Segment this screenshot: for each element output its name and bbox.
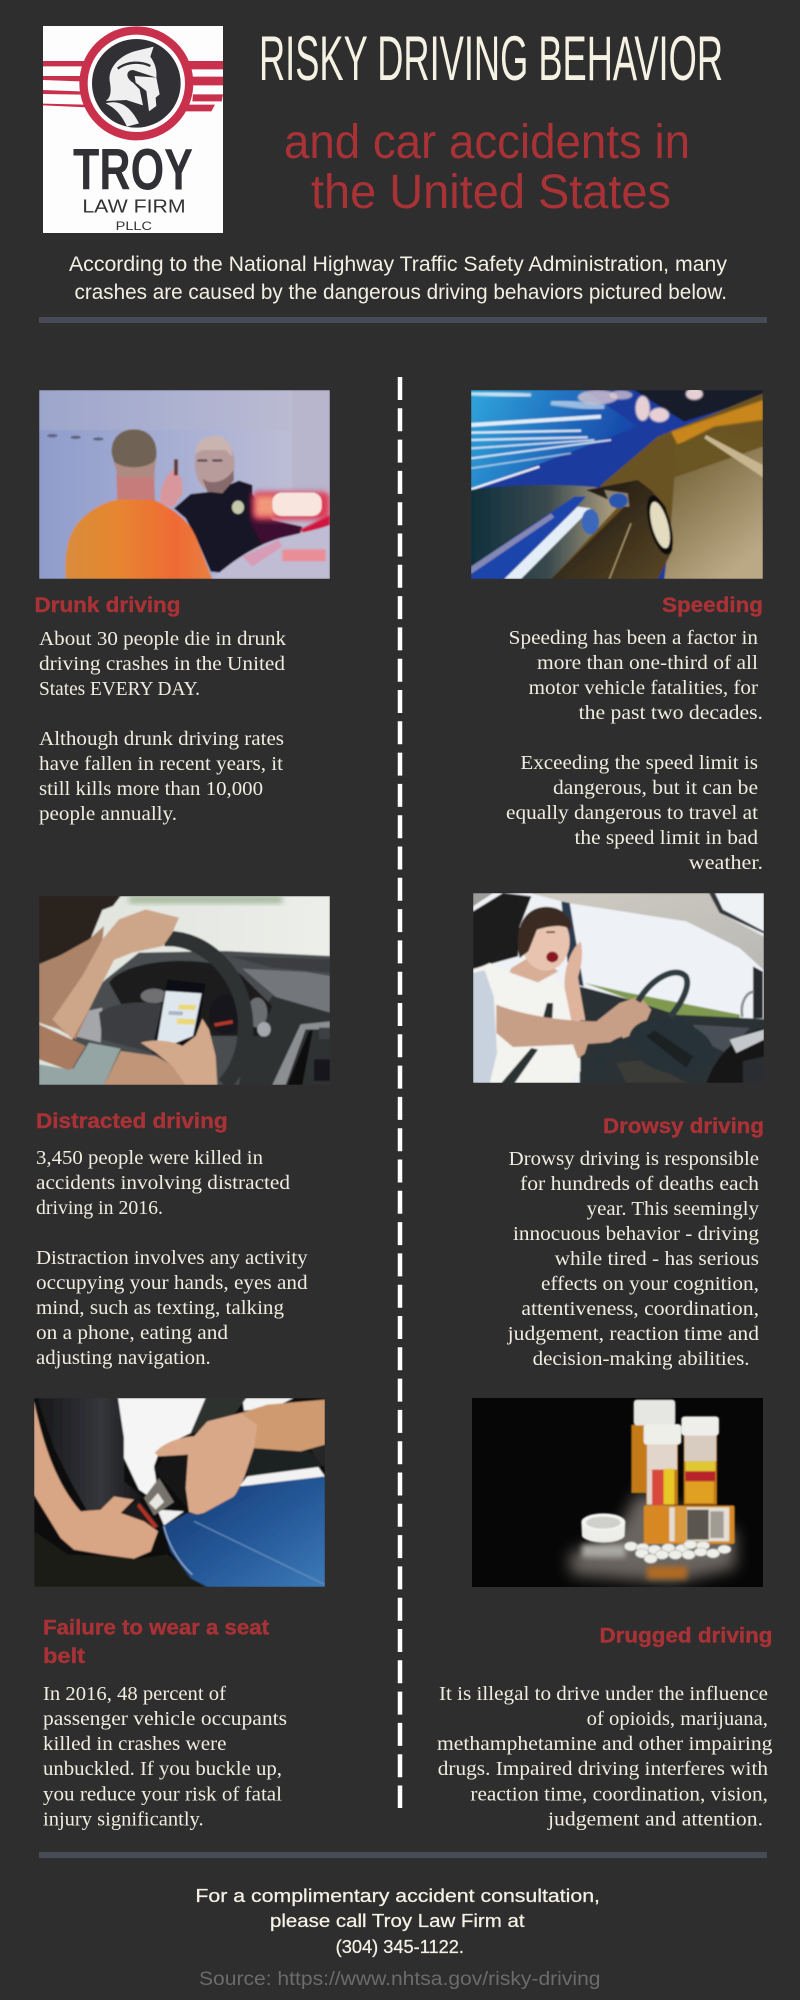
- body text: of opioids, marijuana,: [587, 1708, 768, 1730]
- body text: effects on your cognition,: [541, 1273, 759, 1295]
- left arm and hand: [34, 1401, 158, 1559]
- body text: Exceeding the speed limit is: [520, 752, 758, 774]
- body text: occupying your hands, eyes and: [36, 1272, 308, 1294]
- body text: It is illegal to drive under the influence: [439, 1683, 768, 1705]
- body text: accidents involving distracted: [36, 1172, 290, 1194]
- body text: judgement, reaction time and: [507, 1323, 759, 1345]
- neck and arm: [39, 926, 104, 1039]
- body text: [437, 1683, 772, 1831]
- body text: States EVERY DAY.: [39, 678, 200, 700]
- body text: more than one-third of all: [537, 652, 758, 674]
- photo: yawning driver: [473, 893, 764, 1083]
- body text: 3,450 people were killed in: [36, 1147, 263, 1169]
- jeans: [162, 1476, 325, 1587]
- subtitle: and car accidents in: [284, 116, 690, 169]
- seat: [473, 893, 531, 969]
- console: [706, 1028, 764, 1083]
- neck: [510, 953, 558, 982]
- photo: texting at the wheel: [39, 896, 330, 1085]
- body text: driving in 2016.: [36, 1197, 163, 1219]
- body text: methamphetamine and other impairing: [437, 1733, 772, 1755]
- body text: decision-making abilities.: [533, 1348, 750, 1370]
- photo: fastening a seat belt: [34, 1398, 325, 1587]
- body text: people annually.: [39, 803, 177, 825]
- source line: Source: https://www.nhtsa.gov/risky-driving: [199, 1969, 600, 1990]
- panel: distracted driving: [36, 896, 330, 1369]
- steering wheel: [638, 973, 687, 1017]
- phone: [152, 979, 206, 1060]
- roof and pillar: [530, 893, 764, 970]
- body text: [43, 1683, 287, 1831]
- body text: driving crashes in the United: [39, 653, 285, 675]
- body text: while tired - has serious: [555, 1248, 759, 1270]
- belt: [191, 1398, 246, 1435]
- body text: Although drunk driving rates: [39, 728, 284, 750]
- body text: [506, 627, 763, 874]
- icon: red wing stripes: [43, 61, 223, 111]
- body text: innocuous behavior - driving: [513, 1223, 759, 1245]
- driver: [116, 473, 155, 502]
- icon: helmet medallion: [79, 26, 193, 140]
- body text: motor vehicle fatalities, for: [529, 677, 758, 699]
- heading: Drugged driving: [600, 1624, 772, 1648]
- body text: weather.: [689, 852, 763, 874]
- seat of wheel spoke: [74, 1008, 102, 1043]
- officer: [174, 481, 262, 573]
- bottles: [631, 1425, 659, 1493]
- intro text: [69, 253, 727, 304]
- heading: Failure to wear a seat: [43, 1617, 269, 1640]
- raised hand: [565, 941, 585, 1020]
- road: [551, 393, 763, 579]
- heading: Drowsy driving: [603, 1115, 764, 1138]
- vents: [272, 1021, 330, 1085]
- body text: year. This seemingly: [587, 1198, 759, 1220]
- panel: speeding: [471, 388, 763, 874]
- subtitle: the United States: [311, 166, 671, 219]
- intro text: crashes are caused by the dangerous driving behaviors pictured below.: [74, 281, 727, 304]
- logo: Troy Law Firm: LAW FIRM: [82, 196, 186, 217]
- body text: for hundreds of deaths each: [520, 1173, 759, 1195]
- road centre dashed line: [398, 377, 402, 1808]
- body text: In 2016, 48 percent of: [43, 1683, 226, 1705]
- pills: [624, 1540, 731, 1563]
- body text: drugs. Impaired driving interferes with: [438, 1758, 768, 1780]
- buckle: [154, 1453, 191, 1510]
- logo: Troy Law Firm: PLLC: [116, 219, 152, 233]
- call to action: please call Troy Law Firm at: [270, 1911, 524, 1931]
- body text: injury significantly.: [43, 1809, 204, 1831]
- heading: Drunk driving: [34, 594, 180, 617]
- call to action: For a complimentary accident consultation,: [195, 1886, 600, 1906]
- right arm: [241, 1400, 325, 1451]
- body text: Drowsy driving is responsible: [509, 1148, 759, 1170]
- body text: [39, 628, 286, 825]
- body text: judgement and attention.: [547, 1809, 763, 1831]
- body text: mind, such as texting, talking: [36, 1297, 284, 1319]
- body text: adjusting navigation.: [36, 1347, 211, 1369]
- body text: [36, 1147, 308, 1369]
- body text: Speeding has been a factor in: [509, 627, 758, 649]
- hair: [39, 896, 121, 964]
- panel: drunk driving: [34, 390, 330, 825]
- blouse: [473, 963, 580, 1083]
- logo: Troy Law Firm: [43, 26, 223, 233]
- dashboard: [72, 951, 330, 1085]
- body text: the speed limit in bad: [574, 827, 758, 849]
- steering wheel: [164, 939, 246, 1085]
- body text: Distraction involves any activity: [36, 1247, 308, 1269]
- car body: [551, 480, 673, 579]
- subtitle: [284, 116, 690, 219]
- face and hair: [522, 912, 570, 971]
- body text: you reduce your risk of fatal: [43, 1784, 282, 1806]
- heading: Distracted driving: [36, 1110, 228, 1133]
- holding hand: [141, 1019, 217, 1085]
- bottle cap: [581, 1522, 625, 1543]
- body text: the past two decades.: [579, 702, 763, 724]
- body text: About 30 people die in drunk: [39, 628, 286, 650]
- body text: unbuckled. If you buckle up,: [43, 1758, 282, 1780]
- body text: equally dangerous to travel at: [506, 802, 758, 824]
- body text: on a phone, eating and: [36, 1322, 228, 1344]
- body text: dangerous, but it can be: [553, 777, 758, 799]
- panel: drowsy driving: [473, 893, 764, 1370]
- body text: have fallen in recent years, it: [39, 753, 283, 775]
- panel: drugged driving: [437, 1398, 772, 1831]
- body text: reaction time, coordination, vision,: [470, 1784, 768, 1806]
- shoulder and strap: [39, 1024, 86, 1071]
- photo: prescription bottles: [472, 1398, 763, 1587]
- intro text: According to the National Highway Traffic Safety Administration, many: [69, 253, 727, 276]
- photo: police officer and driver: [39, 390, 330, 579]
- photo: speeding car: [471, 390, 763, 579]
- heading: [43, 1617, 269, 1668]
- heading: Speeding: [662, 594, 763, 617]
- call to action: (304) 345-1122.: [336, 1937, 464, 1957]
- body text: [507, 1148, 759, 1370]
- heading: belt: [43, 1645, 85, 1668]
- body text: still kills more than 10,000: [39, 778, 263, 800]
- shirt: [118, 1398, 206, 1496]
- arm: [496, 996, 651, 1047]
- fallen bottle: [644, 1505, 735, 1544]
- car window: [471, 485, 624, 579]
- body text: killed in crashes were: [43, 1733, 227, 1755]
- red light: [252, 492, 330, 520]
- body text: attentiveness, coordination,: [521, 1298, 759, 1320]
- body text: passenger vehicle occupants: [43, 1708, 287, 1730]
- field and door: [585, 983, 740, 1018]
- car: [212, 525, 330, 579]
- right hand: [155, 1413, 257, 1515]
- call to action: [195, 1886, 600, 1957]
- panel: seat belt: [34, 1398, 325, 1831]
